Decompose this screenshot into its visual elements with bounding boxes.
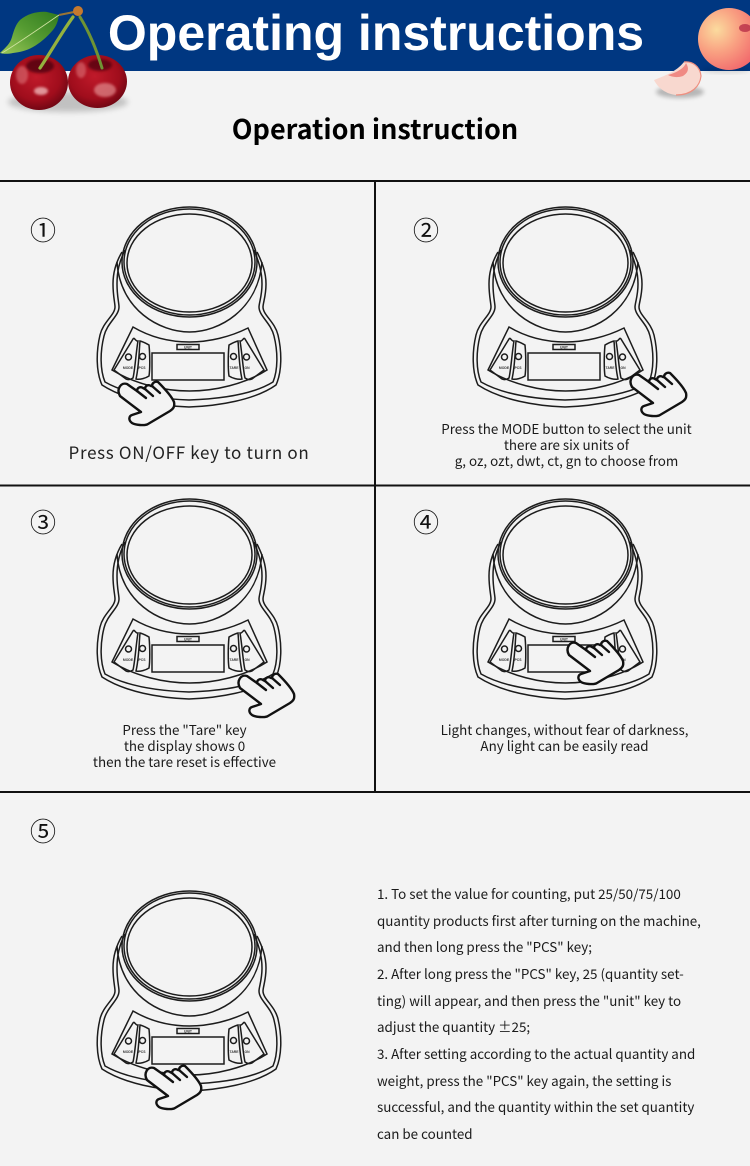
- header banner: [0, 0, 750, 71]
- illustration: scale 2 with MODE hand: TARE: [606, 366, 615, 370]
- step 1 caption: Press ON/OFF key to turn on: [69, 439, 309, 464]
- illustration: scale 4 with light hand: UNIT: [560, 638, 569, 642]
- panel grid lines: [0, 181, 750, 792]
- illustration: scale 2 with MODE hand: PCS: [515, 366, 522, 370]
- illustration: scale 5 with PCS hand: MODE: [123, 1050, 134, 1054]
- illustration: scale 5 with PCS hand: [97, 891, 281, 1109]
- step number 4: ④: [413, 503, 439, 540]
- step 3 caption: the display shows 0: [124, 735, 245, 755]
- step 5 instructions: ting) will appear, and then press the "unit" key to: [377, 990, 681, 1010]
- step 3 caption: then the tare reset is effective: [93, 751, 276, 771]
- step 5 instructions: 3. After setting according to the actual quantity and: [377, 1043, 695, 1063]
- section heading: Operation instruction: [232, 108, 518, 147]
- illustration: scale 1 with ON/OFF hand: [97, 207, 281, 425]
- icon: peach: [654, 8, 750, 98]
- step number 3: ③: [30, 503, 56, 540]
- icon: cherries: [0, 6, 128, 112]
- step 3 caption: [93, 719, 276, 771]
- step number 1: ①: [30, 211, 56, 248]
- illustration: scale 2 with MODE hand: ON: [620, 366, 626, 370]
- illustration: scale 1 with ON/OFF hand: TARE: [230, 366, 239, 370]
- illustration: scale 3 with TARE hand: MODE: [123, 658, 134, 662]
- illustration: scale 4 with light hand: TARE: [606, 658, 615, 662]
- step number 2: ②: [413, 211, 439, 248]
- illustration: scale 4 with light hand: PCS: [515, 658, 522, 662]
- illustration: scale 3 with TARE hand: ON: [244, 658, 250, 662]
- illustration: scale 5 with PCS hand: ON: [244, 1050, 250, 1054]
- illustration: scale 2 with MODE hand: MODE: [499, 366, 510, 370]
- step 2 caption: Press the MODE button to select the unit: [441, 418, 692, 438]
- step 5 instructions: can be counted: [377, 1123, 473, 1143]
- illustration: scale 1 with ON/OFF hand: ON: [244, 366, 250, 370]
- illustration: scale 1 with ON/OFF hand: PCS: [139, 366, 146, 370]
- illustration: scale 4 with light hand: ON: [620, 658, 626, 662]
- illustration: scale 3 with TARE hand: PCS: [139, 658, 146, 662]
- step 2 caption: [441, 418, 692, 470]
- step 4 caption: [441, 719, 688, 755]
- step 5 instructions: 2. After long press the "PCS" key, 25 (quantity set-: [377, 963, 684, 983]
- step 5 instructions: adjust the quantity ±25;: [377, 1016, 530, 1036]
- step 5 instructions: quantity products first after turning on the machine,: [377, 910, 701, 930]
- illustration: scale 3 with TARE hand: UNIT: [184, 638, 193, 642]
- illustration: scale 4 with light hand: MODE: [499, 658, 510, 662]
- illustration: scale 5 with PCS hand: TARE: [230, 1050, 239, 1054]
- illustration: scale 2 with MODE hand: UNIT: [560, 346, 569, 350]
- illustration: scale 2 with MODE hand: [473, 207, 686, 416]
- step 4 caption: Light changes, without fear of darkness,: [441, 719, 688, 739]
- step 5 instructions: weight, press the "PCS" key again, the setting is: [377, 1070, 671, 1090]
- step 5 instructions: [377, 883, 701, 1143]
- illustration: scale 5 with PCS hand: UNIT: [184, 1030, 193, 1034]
- step 2 caption: g, oz, ozt, dwt, ct, gn to choose from: [455, 450, 678, 470]
- step 4 caption: Any light can be easily read: [480, 735, 649, 755]
- illustration: scale 1 with ON/OFF hand: MODE: [123, 366, 134, 370]
- step 2 caption: there are six units of: [504, 434, 629, 454]
- illustration: scale 3 with TARE hand: TARE: [230, 658, 239, 662]
- illustration: scale 5 with PCS hand: PCS: [139, 1050, 146, 1054]
- step 5 instructions: successful, and the quantity within the set quantity: [377, 1096, 694, 1116]
- step 5 instructions: and then long press the "PCS" key;: [377, 936, 592, 956]
- illustration: scale 3 with TARE hand: [97, 499, 294, 717]
- header title: Operating instructions: [108, 5, 644, 61]
- step 3 caption: Press the "Tare" key: [122, 719, 247, 739]
- illustration: scale 1 with ON/OFF hand: UNIT: [184, 346, 193, 350]
- step 5 instructions: 1. To set the value for counting, put 25/50/75/100: [377, 883, 681, 903]
- step number 5: ⑤: [30, 812, 56, 849]
- illustration: scale 4 with light hand: [473, 499, 657, 699]
